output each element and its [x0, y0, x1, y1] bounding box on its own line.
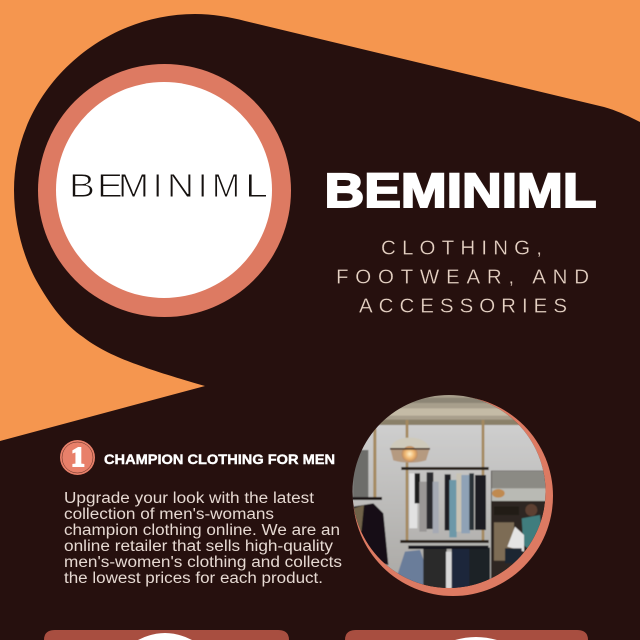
- lamp: [390, 438, 430, 463]
- bottom card right: [345, 630, 588, 640]
- tagline: [336, 236, 589, 317]
- logo wordmark: E: [97, 168, 123, 205]
- section body text: men's-women's clothing and collects: [64, 554, 342, 571]
- logo wordmark: M: [212, 168, 240, 205]
- logo wordmark: M: [118, 168, 149, 205]
- logo wordmark: L: [245, 168, 268, 205]
- section body text: the lowest prices for each product.: [64, 570, 323, 587]
- tagline: CLOTHING,: [381, 236, 542, 259]
- section body text: online retailer that sells high-quality: [64, 538, 333, 555]
- logo wordmark: N: [167, 168, 194, 205]
- section body text: [64, 490, 342, 587]
- section body text: Upgrade your look with the latest: [64, 490, 315, 507]
- logo wordmark: I: [198, 168, 207, 205]
- badge ring: [38, 64, 291, 317]
- logo wordmark: B: [69, 168, 95, 205]
- hanging garments: [409, 472, 486, 537]
- left card icon disc: [138, 633, 192, 640]
- bottom card left: [44, 630, 289, 640]
- section heading: CHAMPION CLOTHING FOR MEN: [104, 451, 335, 467]
- logo wordmark: [69, 168, 268, 205]
- logo wordmark: I: [153, 168, 162, 205]
- tagline: FOOTWEAR, AND: [336, 265, 589, 288]
- brand title: BEMINIML: [324, 164, 596, 218]
- badge white disc: [56, 82, 272, 298]
- section 1 text: [60, 440, 342, 587]
- section body text: collection of men's-womans: [64, 506, 274, 523]
- section body text: champion clothing online. We are an: [64, 522, 340, 539]
- photo base: [352, 395, 546, 588]
- clothing store photo: [352, 395, 546, 588]
- number badge: 1: [71, 442, 85, 472]
- logo badge: [38, 64, 291, 317]
- tagline: ACCESSORIES: [359, 294, 567, 317]
- right card icon disc: [455, 637, 497, 640]
- photo ring: [353, 396, 553, 596]
- store photo with ring: [347, 392, 553, 596]
- mirror: [490, 470, 546, 578]
- number badge: [60, 440, 95, 475]
- lower garments: [397, 546, 490, 590]
